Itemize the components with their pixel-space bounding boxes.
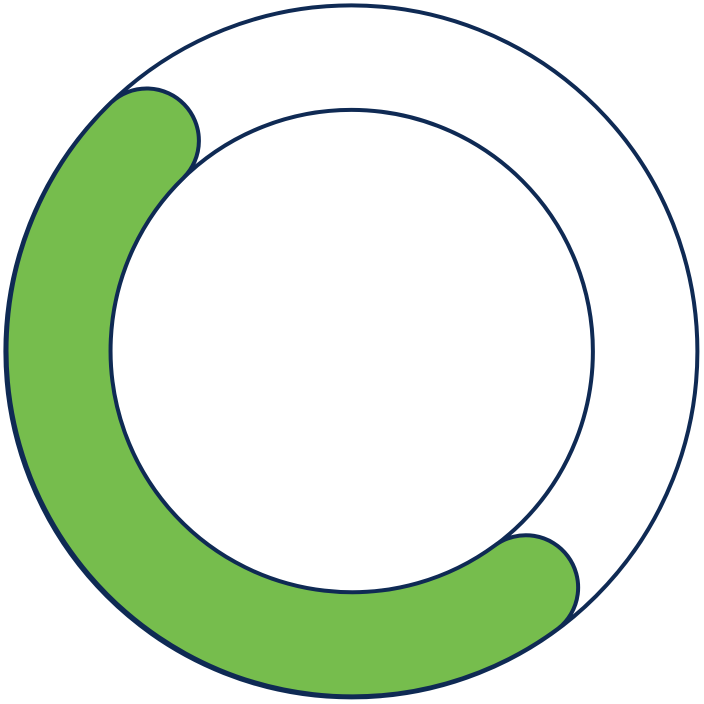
inner ring outline xyxy=(110,110,593,593)
green progress arc xyxy=(7,89,578,696)
